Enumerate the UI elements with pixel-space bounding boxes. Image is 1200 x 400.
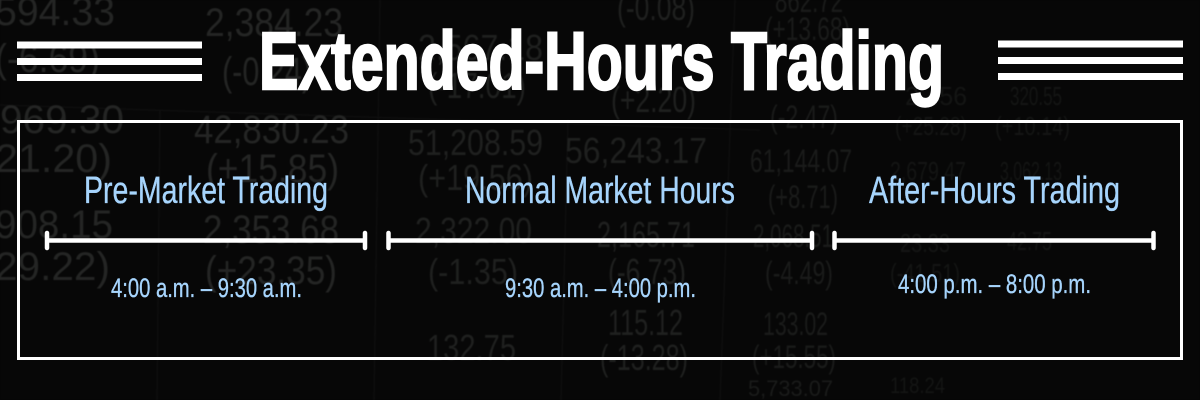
background: stock ticker numbers: 56,243.17 [565, 130, 707, 171]
time range: pre-market: 4:00 a.m. – 9:30 a.m. [111, 273, 302, 303]
heading: after-hours trading: After-Hours Trading [869, 170, 1120, 212]
bracket: normal market span [388, 233, 812, 248]
bracket: pre-market span [47, 233, 365, 248]
heading: normal market hours: Normal Market Hours [465, 170, 735, 212]
background: stock ticker numbers: (-4.49) [765, 255, 833, 291]
background: stock ticker numbers: 2,353.68 [203, 208, 339, 252]
background: stock ticker numbers: (+15.55) [752, 339, 836, 375]
background: stock ticker numbers: 23.33 [900, 228, 950, 258]
background: stock ticker numbers: (+19.56) [418, 157, 533, 198]
background: stock ticker numbers: (-13.28) [600, 337, 688, 378]
background: stock ticker numbers: 133.02 [763, 306, 828, 342]
background: stock ticker numbers: 2,165.71 [597, 214, 695, 255]
left title lines [17, 42, 202, 81]
background: stock ticker numbers: (+2.20) [611, 79, 696, 120]
background: stock ticker numbers: 2,068.51 [753, 218, 833, 254]
background: stock ticker numbers: 2,384.23 [205, 1, 343, 45]
background: stock ticker numbers: 2,679.47 [890, 156, 966, 186]
background: stock ticker numbers: (-1.35) [428, 251, 518, 292]
bracket: after-hours span [834, 233, 1154, 248]
title: Extended-Hours Trading [259, 16, 944, 107]
background: stock ticker numbers: (+25.28) [895, 111, 967, 141]
background: stock ticker numbers: 2,456 [905, 81, 967, 111]
time range: normal market: 9:30 a.m. – 4:00 p.m. [505, 273, 696, 303]
background: stock ticker numbers: (-2.47) [770, 99, 838, 135]
background: stock ticker numbers: 320.55 [1010, 81, 1062, 111]
right title lines [998, 40, 1183, 80]
background: stock ticker numbers: 115.12 [608, 302, 683, 343]
background: stock ticker numbers: 118.24 [890, 373, 945, 398]
time range: after-hours: 4:00 p.m. – 8:00 p.m. [898, 269, 1091, 299]
background: stock ticker numbers: (+15.85) [206, 147, 339, 191]
background: stock ticker numbers: 51,208.59 [408, 122, 543, 163]
panel: sessions frame [18, 122, 1182, 358]
panel: normal market hours [388, 170, 812, 303]
background: stock ticker numbers: (+23.35) [205, 249, 337, 293]
background: stock ticker numbers: (-6.73) [608, 251, 686, 292]
background: stock ticker numbers: 42,830.23 [194, 108, 349, 152]
background: stock ticker numbers: 132.75 [427, 327, 516, 368]
background: stock ticker numbers: (+13.68) [765, 11, 850, 47]
background: stock ticker numbers: (-41.51) [890, 258, 960, 288]
background: stock ticker numbers: (-0.24) [222, 50, 312, 94]
panel: pre-market trading [47, 170, 365, 303]
background: stock ticker numbers: 61,144.07 [750, 143, 852, 179]
background: stock ticker numbers: 3,062.13 [1000, 156, 1062, 186]
background: stock ticker numbers: 969.30 [0, 98, 124, 142]
background: stock ticker numbers: 42.75 [1007, 226, 1052, 256]
background: stock ticker numbers: 2,567.18 [418, 27, 543, 68]
heading: pre-market trading: Pre-Market Trading [84, 170, 328, 212]
background: stock ticker numbers: (-17.01) [428, 65, 526, 106]
background: stock ticker numbers: 2,322.00 [415, 210, 532, 251]
background: stock ticker numbers: (+10.14) [995, 111, 1070, 141]
panel: after-hours trading [834, 170, 1154, 299]
background: stock ticker numbers: (+8.71) [768, 179, 838, 215]
